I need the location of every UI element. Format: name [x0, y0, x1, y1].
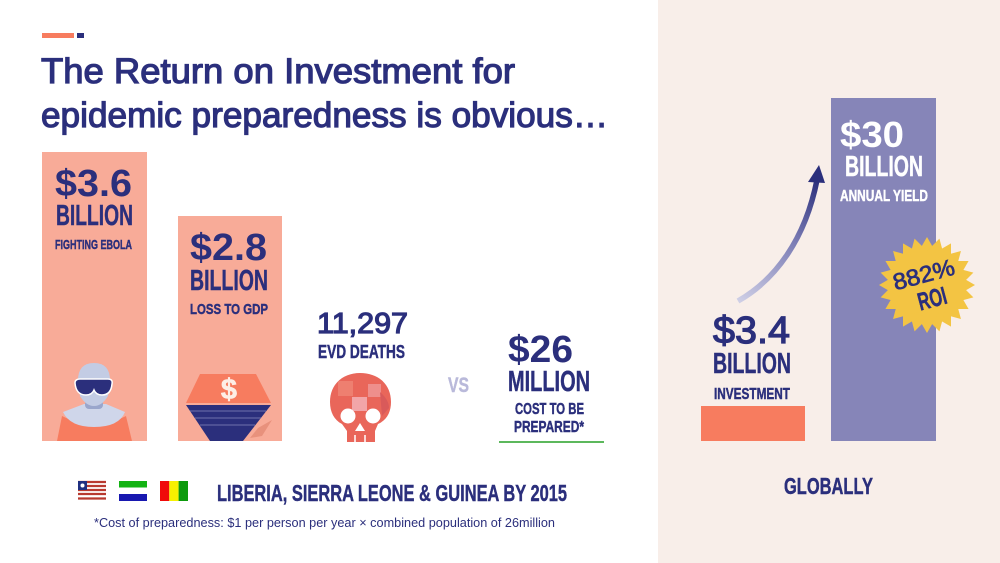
panel: GDP loss bar: LOSS TO GDP — [190, 301, 268, 318]
accent mark — [42, 33, 84, 38]
panel: annual yield bar: BILLION — [845, 151, 923, 183]
stat: cost to be prepared: COST TO BE — [515, 401, 584, 418]
panel: right background — [658, 0, 1000, 563]
badge: ROI: ROI — [915, 282, 950, 316]
panel: fighting Ebola bar: $3.6 — [55, 163, 132, 205]
label: versus: VS — [448, 374, 469, 397]
panel: GDP loss bar — [178, 216, 282, 441]
icon: skull — [330, 373, 391, 442]
panel: fighting Ebola bar: FIGHTING EBOLA — [55, 237, 132, 252]
flag: Sierra Leone — [119, 481, 147, 501]
stat: cost to be prepared: PREPARED* — [514, 419, 585, 436]
panel: fighting Ebola bar: BILLION — [56, 200, 133, 232]
panel: annual yield bar: $30 — [840, 114, 904, 155]
stat: EVD deaths: 11,297 — [317, 308, 408, 340]
flag: Guinea — [160, 481, 188, 501]
panel: investment bar: $3.4 — [713, 310, 790, 352]
stat: cost to be prepared — [499, 329, 604, 443]
title: The Return on Investment for — [41, 52, 515, 91]
panel: fighting Ebola bar — [42, 152, 147, 441]
heading: globally: GLOBALLY — [784, 473, 873, 499]
arrow: growth — [738, 165, 825, 301]
panel: GDP loss bar: $2.8 — [190, 227, 267, 269]
icon: stack of money: $ — [221, 374, 237, 406]
flag: Liberia — [78, 481, 106, 501]
panel: GDP loss bar: BILLION — [190, 265, 268, 297]
panel: investment bar: INVESTMENT — [714, 386, 790, 403]
icon: protective suit figure — [57, 363, 132, 441]
panel: investment bar — [701, 310, 805, 441]
badge: ROI: 882% — [890, 254, 957, 295]
panel: investment bar: BILLION — [713, 348, 791, 380]
stat: EVD deaths: EVD DEATHS — [318, 342, 405, 362]
panel: annual yield bar — [831, 98, 936, 441]
title — [41, 52, 608, 135]
heading: region label: LIBERIA, SIERRA LEONE & GUINEA BY 2015 — [217, 480, 567, 506]
badge: ROI — [879, 222, 990, 338]
footnote: *Cost of preparedness: $1 per person per year × combined population of 26million — [94, 516, 555, 530]
title: epidemic preparedness is obvious… — [41, 96, 608, 135]
stat: EVD deaths — [317, 308, 408, 362]
icon: stack of money — [186, 374, 272, 441]
stat: cost to be prepared: MILLION — [508, 366, 590, 398]
panel: annual yield bar: ANNUAL YIELD — [840, 188, 928, 205]
stat: cost to be prepared: $26 — [508, 329, 573, 371]
